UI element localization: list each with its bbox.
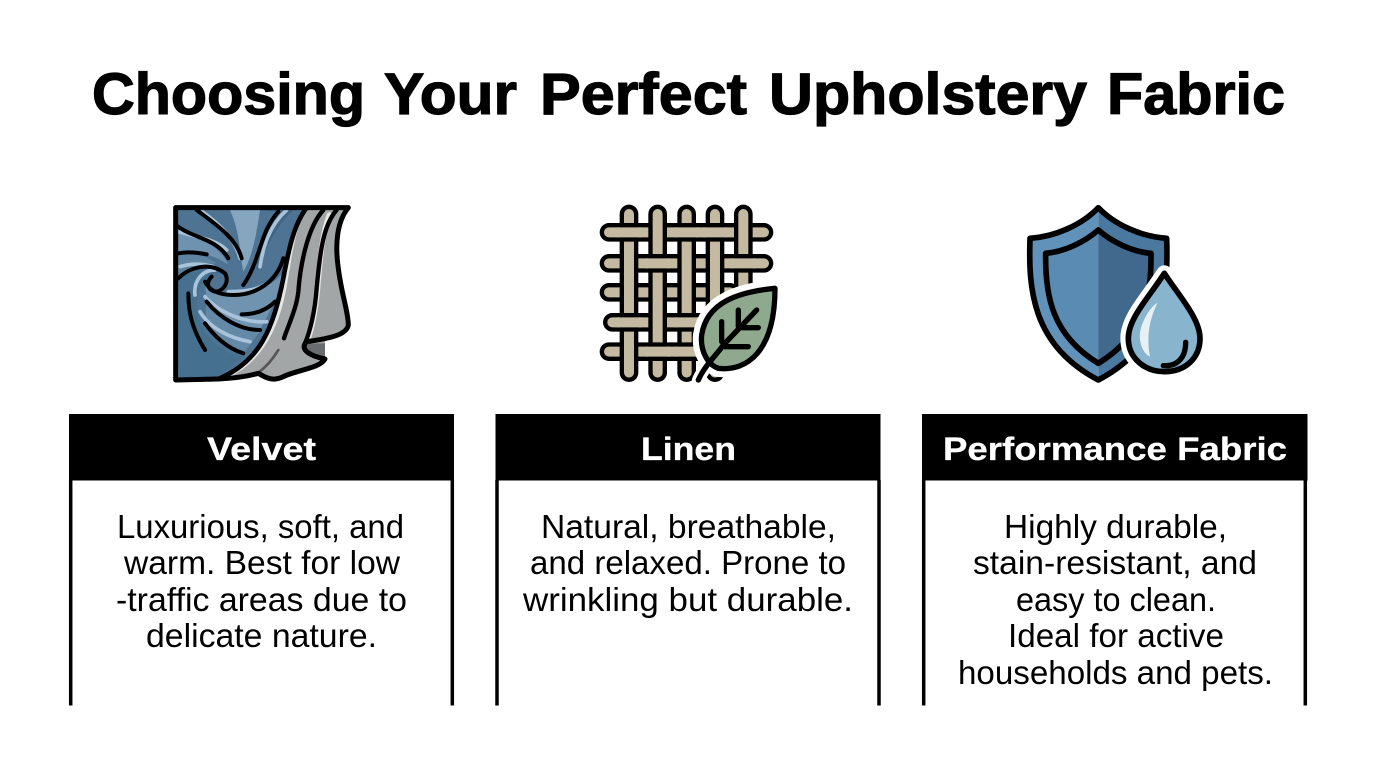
- title: Fabric: [1107, 62, 1285, 127]
- leaf: [698, 288, 775, 380]
- linen description: Natural, breathable,: [541, 508, 836, 545]
- panel: linen: [496, 414, 880, 706]
- performance description: households and pets.: [958, 654, 1273, 691]
- panel: velvet: [69, 414, 454, 706]
- velvet description: warm. Best for low: [123, 544, 400, 581]
- linen heading: Linen: [641, 431, 736, 467]
- velvet header bar: [69, 414, 454, 480]
- panel: performance fabric: [922, 414, 1308, 706]
- velvet description: delicate nature.: [146, 617, 377, 654]
- title: Your: [384, 62, 517, 127]
- icon: velvet swatch: [176, 208, 348, 380]
- linen description: [522, 508, 853, 618]
- velvet description: Luxurious, soft, and: [117, 508, 404, 545]
- performance description: Ideal for active: [1008, 617, 1224, 654]
- linen header bar: [496, 414, 880, 480]
- performance description: Highly durable,: [1004, 508, 1227, 545]
- linen description: and relaxed. Prone to: [530, 544, 846, 581]
- linen card outline: [497, 480, 879, 706]
- linen description: wrinkling but durable.: [522, 581, 853, 618]
- performance description: [958, 508, 1273, 691]
- icon: shield with water drop: [1030, 208, 1200, 380]
- performance heading: Performance Fabric: [943, 431, 1287, 467]
- performance description: stain-resistant, and: [973, 544, 1257, 581]
- velvet description: [116, 508, 407, 654]
- performance header bar: [922, 414, 1308, 480]
- title: Choosing: [92, 62, 365, 127]
- performance description: easy to clean.: [1016, 581, 1216, 618]
- velvet card outline: [71, 480, 452, 706]
- title: Upholstery: [769, 62, 1087, 127]
- velvet heading: Velvet: [207, 431, 316, 467]
- title: Perfect: [540, 62, 747, 127]
- water drop: [1128, 273, 1200, 372]
- performance card outline: [924, 480, 1305, 706]
- velvet description: -traffic areas due to: [116, 581, 407, 618]
- icon: linen weave with leaf: [609, 214, 775, 380]
